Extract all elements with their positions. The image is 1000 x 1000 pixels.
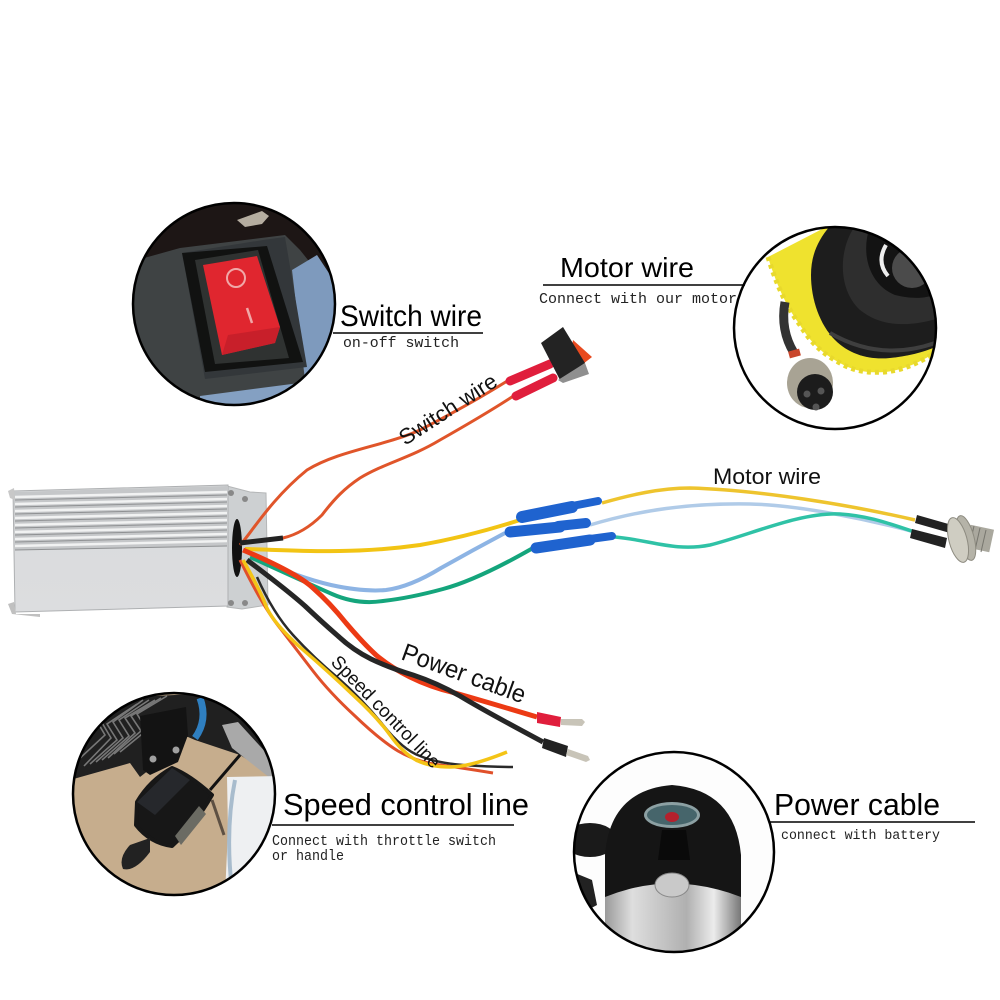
wires: power cable <box>243 550 543 742</box>
end plate <box>227 486 268 609</box>
heading: Speed control line: or handle <box>272 849 344 865</box>
wires: switch dark sleeve <box>240 538 283 543</box>
heading: Motor wire: Motor wire <box>560 252 694 283</box>
heading: Speed control line <box>272 787 529 865</box>
icon: motor cable plug <box>784 302 833 410</box>
heading: Speed control line: Connect with throttle switch <box>272 834 496 850</box>
aluminium body <box>13 485 228 612</box>
controller box <box>8 485 268 617</box>
heading: Motor wire: Connect with our motor <box>539 291 737 308</box>
heading: Power cable: Power cable <box>774 787 940 822</box>
icon: panel-mount motor plug <box>910 514 994 565</box>
photo: motor with connector <box>734 226 940 429</box>
wire label: Switch wire: Switch wire <box>394 368 502 450</box>
wire label: Power cable: Power cable <box>398 638 530 709</box>
icon: blue bullet connectors <box>510 501 612 548</box>
wires: motor phases <box>245 488 915 602</box>
yellow toothed wheel <box>768 226 940 372</box>
photo: battery bottle <box>563 750 780 960</box>
wires: switch <box>240 378 518 545</box>
heading: Speed control line: Speed control line <box>283 787 529 822</box>
heading: Power cable: connect with battery <box>781 829 940 844</box>
icon: switch with red terminals <box>510 327 592 396</box>
wire label: Speed control line: Speed control line <box>326 652 444 773</box>
wires: speed control <box>240 560 513 773</box>
heading: Motor wire <box>539 252 745 308</box>
photo: throttle handle <box>70 690 280 900</box>
photo: rocker switch <box>130 200 340 410</box>
heading: Switch wire: Switch wire <box>340 300 482 333</box>
icon: red ring terminal <box>537 712 585 727</box>
wire label: Motor wire: Motor wire <box>713 464 821 489</box>
heading: Power cable <box>770 787 975 844</box>
icon: black ring terminal <box>542 738 590 762</box>
heading: Switch wire <box>333 300 483 352</box>
heading: Switch wire: on-off switch <box>343 336 459 352</box>
